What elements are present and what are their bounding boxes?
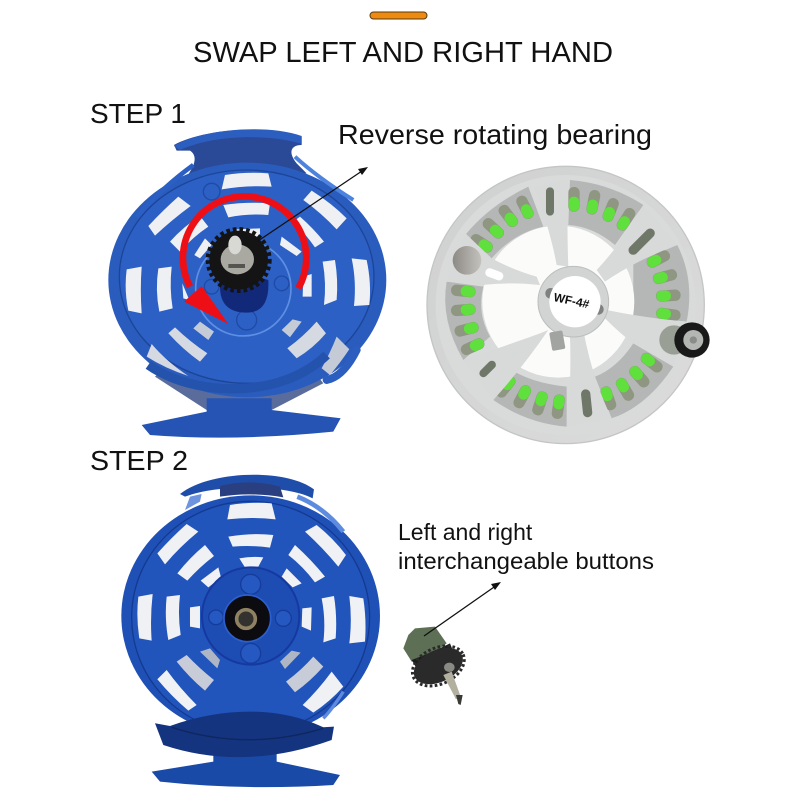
central opening — [482, 226, 634, 378]
red rotation arrow arc — [183, 196, 306, 288]
top foot highlight — [174, 129, 302, 150]
label text: WF-4# — [552, 290, 591, 311]
blue reel, step 2 — [121, 475, 380, 787]
outer rim highlight — [436, 175, 696, 435]
shaft cylinder — [220, 267, 268, 313]
hub dimples — [209, 574, 291, 663]
orange pill accent — [370, 12, 427, 19]
hub plate — [202, 567, 299, 665]
steel pin — [443, 672, 461, 699]
callout line two: interchangeable buttons — [398, 548, 654, 574]
handle — [659, 322, 710, 358]
spoke slots — [478, 187, 657, 418]
hub highlight — [444, 663, 455, 672]
top foot — [174, 129, 307, 177]
bottom seam highlight — [323, 692, 343, 718]
silver reel with green line — [427, 166, 710, 444]
bottom foot — [152, 753, 340, 787]
silver spindle — [221, 236, 254, 274]
black gear — [208, 229, 270, 291]
interchangeable button part — [403, 627, 471, 705]
step 1 label: STEP 1 — [90, 98, 186, 129]
blue reel, step 1 — [108, 129, 386, 438]
reel disc — [121, 495, 380, 737]
green body — [403, 627, 447, 662]
windows — [126, 173, 370, 376]
callout: interchangeable buttons — [398, 519, 654, 574]
callout: reverse rotating bearing: Reverse rotating bearing — [338, 119, 652, 150]
rim hook — [327, 350, 357, 380]
hub — [538, 266, 609, 337]
hub screw holes — [545, 288, 604, 315]
gap right of top foot — [297, 497, 343, 532]
spokes — [447, 179, 687, 427]
bottom foot — [142, 398, 341, 438]
frame left edge highlight — [137, 165, 193, 217]
centre label disc — [549, 276, 601, 327]
step 2 label: STEP 2 — [90, 445, 188, 476]
hub plate — [196, 241, 291, 336]
green line slots — [451, 187, 681, 420]
black collar — [412, 643, 453, 668]
lower rim strip — [148, 355, 327, 389]
small tab — [549, 330, 566, 351]
black gear — [406, 638, 471, 694]
bronze bushing — [237, 610, 255, 628]
arrow to bearing — [258, 167, 368, 241]
inner rim — [119, 170, 374, 383]
bearing opening — [224, 595, 271, 642]
red arrowhead — [184, 286, 228, 324]
top foot shadow — [220, 482, 283, 497]
line pockets — [445, 180, 689, 427]
reel body — [427, 166, 704, 444]
left knob — [453, 246, 481, 275]
callout line one: Left and right — [398, 519, 533, 545]
crescent seam — [172, 727, 323, 740]
arrow to button — [424, 582, 501, 636]
left knob slot — [484, 267, 505, 282]
hub dimples — [203, 183, 289, 330]
frame right edge highlight — [295, 157, 353, 200]
lower shadow crescent — [155, 712, 334, 757]
reel disc — [108, 163, 386, 397]
inner face — [132, 501, 370, 733]
pin tip — [456, 695, 463, 705]
windows — [137, 503, 366, 713]
gap left of top foot — [185, 494, 202, 510]
title: SWAP LEFT AND RIGHT HAND — [193, 37, 613, 69]
top foot — [180, 475, 314, 498]
lower shadow body — [155, 353, 323, 410]
